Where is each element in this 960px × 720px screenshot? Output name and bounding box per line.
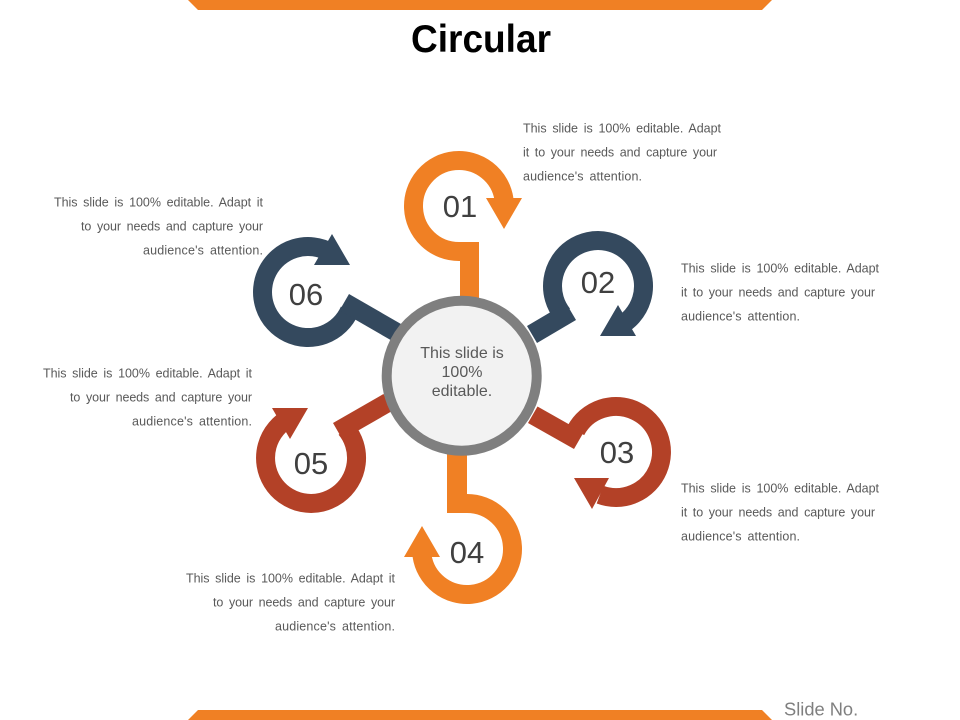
arrow 02 [527,241,644,343]
arrow 06 [263,234,401,340]
arrow 06: 06 [289,277,323,312]
text block 03: audience's attention. [681,530,800,544]
text block 01: This slide is 100% editable. Adapt [523,122,722,136]
text block 01: it to your needs and capture your [523,146,717,160]
text block 05 [43,366,253,428]
text block 03: This slide is 100% editable. Adapt [681,482,880,496]
text block 02: audience's attention. [681,310,800,324]
arrow 03 [528,406,661,509]
text block 05: This slide is 100% editable. Adapt it [43,366,253,380]
arrow 01 [413,160,522,305]
text block 04: audience's attention. [275,620,395,634]
text block 01 [523,122,722,184]
text block 03 [681,482,880,544]
centre circle: 100% [442,364,482,381]
arrow 02: 02 [581,265,615,300]
arrow 04: 04 [450,535,484,570]
centre circle: editable. [432,383,492,400]
arrow 03: 03 [600,435,634,470]
title: Circular [411,18,551,61]
text block 04 [186,572,396,634]
arrow 05: 05 [294,446,328,481]
text block 04: This slide is 100% editable. Adapt it [186,572,396,586]
bottom orange bar [188,710,772,720]
centre circle [387,301,537,451]
text block 02 [681,262,880,324]
text block 06: audience's attention. [143,244,263,258]
text block 05: to your needs and capture your [70,390,252,404]
text block 06: to your needs and capture your [81,220,263,234]
slide number: Slide No. [784,698,858,720]
arrow 04 [404,450,513,594]
top orange bar [188,0,772,10]
text block 06: This slide is 100% editable. Adapt it [54,196,264,210]
arrow 05 [266,394,393,503]
text block 04: to your needs and capture your [213,596,395,610]
text block 06 [54,196,264,258]
text block 03: it to your needs and capture your [681,506,875,520]
text block 02: This slide is 100% editable. Adapt [681,262,880,276]
centre circle: This slide is [420,345,504,362]
arrow 01: 01 [443,189,477,224]
text block 02: it to your needs and capture your [681,286,875,300]
text block 01: audience's attention. [523,170,642,184]
text block 05: audience's attention. [132,414,252,428]
